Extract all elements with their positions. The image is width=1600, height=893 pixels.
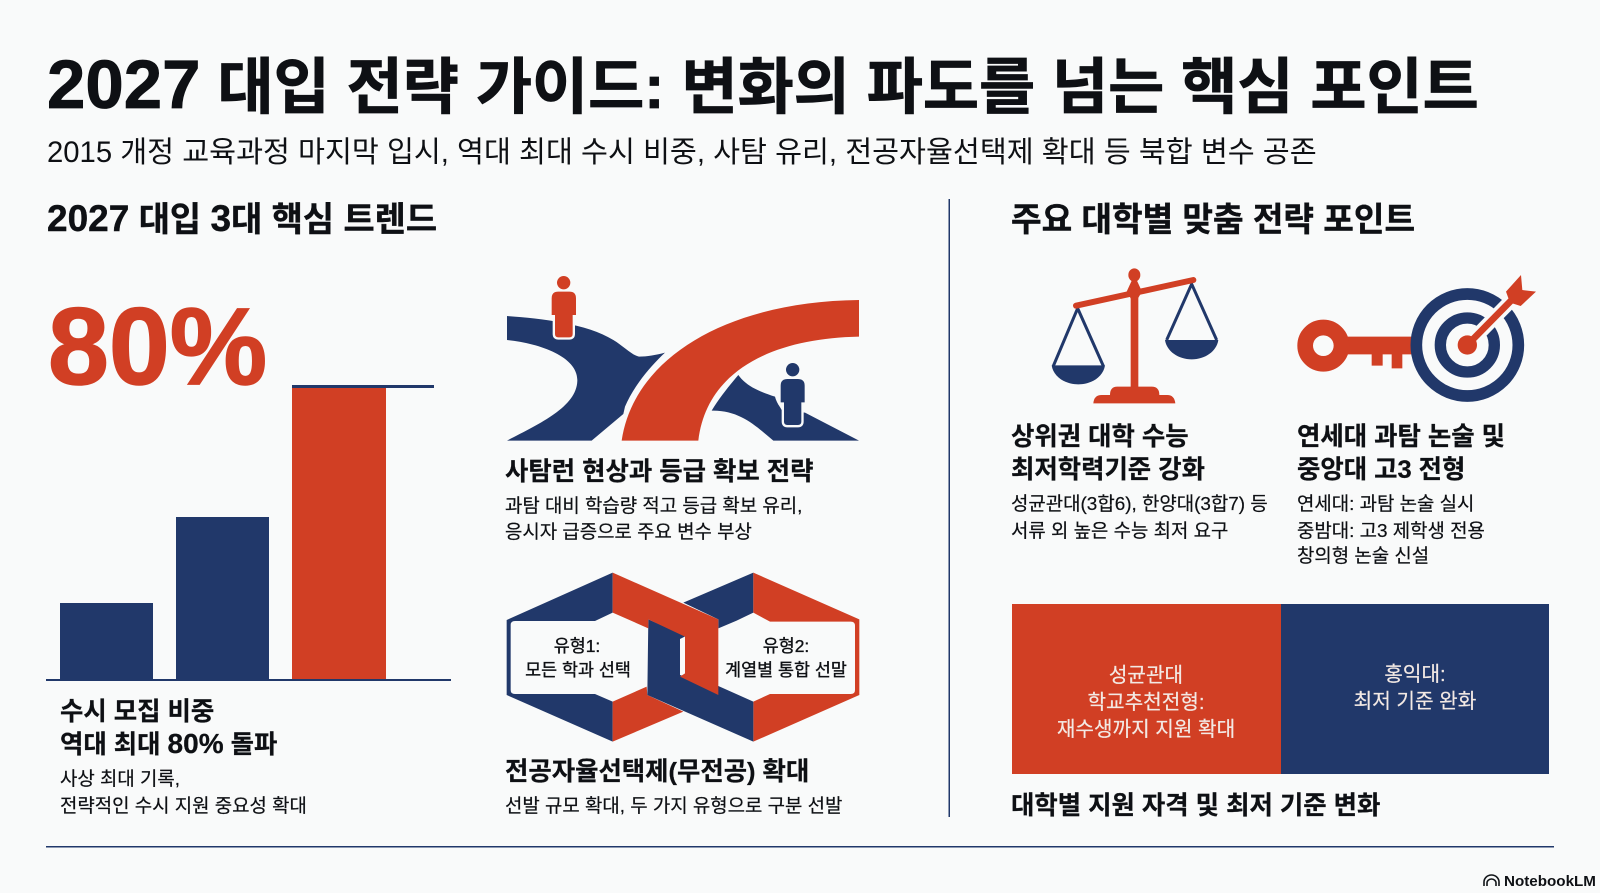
trend heading: 연세대 과탐 논술 및: [1297, 423, 1505, 451]
trend description: 과탐 대비 학습량 적고 등급 확보 유리,: [505, 495, 802, 517]
trend description: 성균관대(3합6), 한양대(3합7) 등: [1011, 493, 1268, 515]
card: Hongik: [1281, 604, 1549, 774]
panel: major free choice: [505, 573, 859, 817]
subtitle: 2015 개정 교육과정 마지막 입시, 역대 최대 수시 비중, 사탐 유리, 전공자율선택제 확대 등 북합 변수 공존: [47, 137, 1317, 169]
heading: 2027 trends: 2027 대입 3대 핵심 트렌드: [47, 198, 437, 239]
trend heading: 사탐런 현상과 등급 확보 전략: [505, 458, 814, 486]
panel: social studies run: [505, 276, 859, 543]
card: Hongik: 최저 기준 완화: [1354, 690, 1476, 713]
trend description: 선발 규모 확대, 두 가지 유형으로 구분 선발: [505, 795, 842, 817]
card: SKKU: [1012, 604, 1281, 774]
trend description: 사상 최대 기록,: [60, 768, 180, 790]
type 1 label: 유형1:: [554, 636, 600, 656]
icon: scales: [1052, 268, 1218, 403]
title: 2027 대입 전략 가이드: 변화의 파도를 넘는 핵심 포인트: [47, 46, 1479, 123]
trend heading: 수시 모집 비중: [60, 698, 214, 726]
type 2 label: 유형2:: [763, 636, 809, 656]
icon: diverging roads with people: [507, 276, 859, 441]
trend description: [505, 495, 802, 543]
trend heading: 전공자율선택제(무전공) 확대: [505, 758, 809, 786]
trend heading: 최저학력기준 강화: [1011, 456, 1205, 484]
logo: NotebookLM: NotebookLM: [1504, 873, 1596, 890]
trend description: 연세대: 과탐 논술 실시: [1297, 493, 1474, 515]
heading: university strategies: 주요 대학별 맞춤 전략 포인트: [1011, 202, 1415, 239]
trend description: [60, 768, 307, 817]
eligibility heading: 대학별 지원 자격 및 최저 기준 변화: [1011, 792, 1380, 820]
type 2 label: 계열별 통합 선말: [725, 660, 847, 680]
trend heading: 역대 최대 80% 돌파: [60, 728, 277, 759]
trend heading: [60, 698, 277, 759]
trend heading: 중앙대 고3 전형: [1297, 456, 1465, 484]
card: SKKU: 학교추천전형:: [1087, 691, 1205, 714]
type 2 label: [725, 636, 847, 680]
icon: key and target: [1305, 275, 1536, 396]
bottom rule: [46, 846, 1554, 848]
type 1 label: [525, 636, 631, 680]
card: SKKU: 재수생까지 지원 확대: [1057, 718, 1235, 741]
panel: top universities: [1011, 268, 1268, 542]
trend heading: [1297, 423, 1505, 484]
trend description: [1297, 493, 1485, 567]
big number 80%: 80%: [48, 286, 267, 408]
trend description: [1011, 493, 1268, 542]
trend description: 전략적인 수시 지원 중요성 확대: [60, 795, 307, 817]
card: Hongik: 홍익대:: [1384, 663, 1446, 686]
panel: 80% trend: [46, 286, 451, 817]
bar chart: [46, 385, 451, 681]
card: SKKU: 성균관대: [1109, 664, 1183, 687]
trend description: 응시자 급증으로 주요 변수 부상: [505, 521, 752, 543]
trend description: 중밤대: 고3 제학생 전용: [1297, 520, 1485, 542]
vertical divider: [948, 199, 950, 817]
panel: yonsei and chung-ang: [1297, 275, 1536, 567]
type 1 label: 모든 학과 선택: [525, 660, 631, 680]
panel: eligibility changes: [1011, 604, 1549, 820]
icon: interlocked hexagons: [507, 573, 859, 742]
trend description: 서류 외 높은 수능 최저 요구: [1011, 520, 1228, 542]
trend heading: [1011, 423, 1205, 484]
trend heading: 상위권 대학 수능: [1011, 423, 1189, 451]
trend description: 창의형 논술 신설: [1297, 545, 1429, 567]
